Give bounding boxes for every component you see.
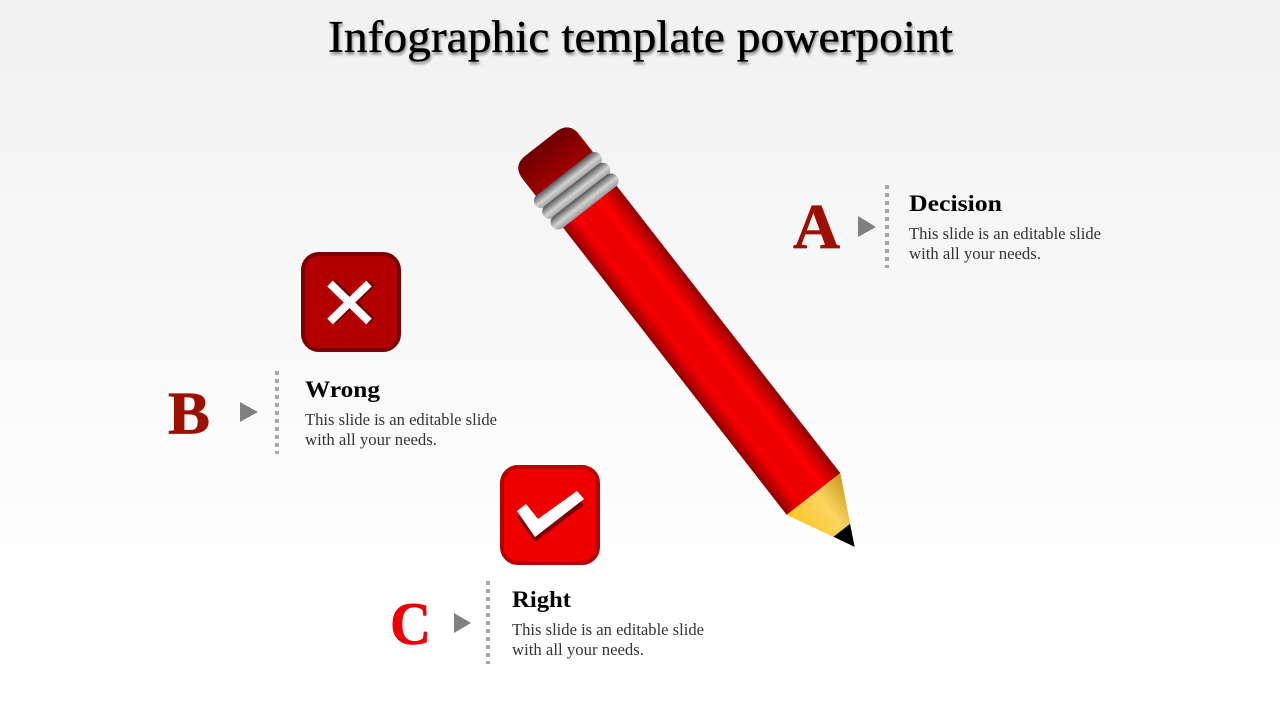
pencil <box>508 119 886 573</box>
item B: Wrong <box>168 371 497 454</box>
heading A: Decision <box>909 191 1002 216</box>
text C: with all your needs. <box>512 640 644 659</box>
divider B <box>275 371 279 454</box>
divider A <box>885 185 889 268</box>
letter B: B <box>168 380 210 446</box>
arrow C <box>454 613 471 633</box>
text B <box>305 410 497 449</box>
pencil lead <box>833 524 863 553</box>
text B: This slide is an editable slide <box>305 410 497 429</box>
title: Infographic template powerpoint <box>329 14 955 64</box>
icon: cross box <box>303 254 399 350</box>
pencil eraser <box>512 122 599 204</box>
heading C: Right <box>512 587 571 612</box>
letter A: A <box>793 192 841 262</box>
icon: check box <box>502 467 598 563</box>
text A: with all your needs. <box>909 244 1041 263</box>
arrow B <box>240 402 258 422</box>
pencil barrel <box>558 180 840 515</box>
divider C <box>486 581 490 664</box>
pencil ferrule rings <box>531 149 621 233</box>
pencil wood tip <box>787 473 881 568</box>
text C: This slide is an editable slide <box>512 620 704 639</box>
text B: with all your needs. <box>305 430 437 449</box>
item C: Right <box>390 581 704 664</box>
heading B: Wrong <box>305 377 381 402</box>
arrow A <box>858 216 876 237</box>
text A: This slide is an editable slide <box>909 224 1101 243</box>
letter C: C <box>390 591 431 657</box>
item A: Decision <box>793 185 1101 268</box>
title: Infographic template powerpoint <box>328 12 954 62</box>
text C <box>512 620 704 659</box>
text A <box>909 224 1101 263</box>
